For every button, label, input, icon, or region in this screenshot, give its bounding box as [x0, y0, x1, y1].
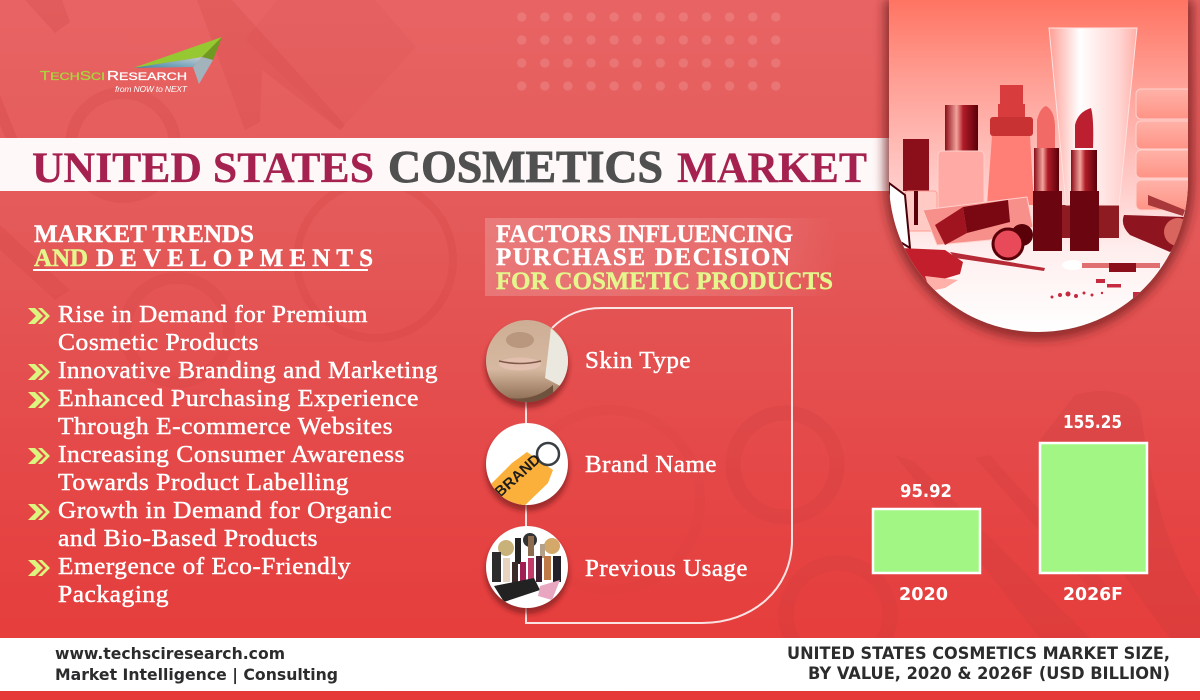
- title: Market: MARKET: [677, 145, 867, 192]
- label: skin type: Skin Type: [585, 348, 691, 374]
- factor: skin type: [485, 320, 691, 408]
- jars: [1136, 89, 1192, 210]
- pump bottle: [987, 85, 1034, 205]
- list item four: Towards Product Labelling: [58, 470, 349, 496]
- value: 95.92: 95.92: [900, 481, 952, 502]
- spilled powder: [1050, 279, 1140, 298]
- photo shadow: [884, 0, 1194, 340]
- logo: TechSci Research: [40, 37, 222, 94]
- logo wordmark: TECH SCI: [40, 68, 105, 83]
- chart caption line two: BY VALUE, 2020 & 2026F (USD BILLION): [808, 664, 1170, 683]
- bar: 2020: [873, 509, 980, 573]
- list item two: Innovative Branding and Marketing: [58, 358, 438, 384]
- nail polish bottle: [903, 139, 937, 231]
- heading line one: FACTORS INFLUENCING: [496, 221, 793, 248]
- footer tagline: Market Intelligence | Consulting: [55, 665, 338, 685]
- footer website: www.techsciresearch.com: [55, 644, 285, 663]
- factor: previous usage: [485, 526, 748, 614]
- title band: [0, 138, 889, 192]
- photo: face with cotton pad: [486, 320, 568, 402]
- title: Cosmetics: COSMETICS: [388, 141, 663, 192]
- photo: assorted cosmetics: [486, 526, 568, 608]
- tube: [1049, 28, 1137, 238]
- list item four: [58, 442, 405, 496]
- list item three: Through E-commerce Websites: [58, 414, 393, 440]
- photo: cosmetics products: [889, 0, 1192, 332]
- list item four: Increasing Consumer Awareness: [58, 442, 405, 468]
- list item three: Enhanced Purchasing Experience: [58, 386, 419, 412]
- heading spaced word: DEVELOPMENTS: [96, 245, 373, 272]
- label: brand name: Brand Name: [585, 452, 717, 478]
- heading accent word: AND: [34, 245, 88, 272]
- bar chart: market size: [873, 412, 1147, 605]
- list item one: Rise in Demand for Premium: [58, 302, 368, 328]
- heading: market trends and developments: [33, 221, 373, 272]
- logo icon: paper plane: [133, 37, 222, 84]
- bar: 2026F: [1040, 443, 1147, 573]
- logo wordmark second part: RESEARCH: [107, 68, 187, 83]
- icon: brand tag: BRAND: [491, 451, 544, 501]
- lying nail polish: [923, 197, 1033, 245]
- list item five: and Bio-Based Products: [58, 526, 318, 552]
- label: previous usage: Previous Usage: [585, 556, 748, 582]
- heading underline: [33, 269, 368, 271]
- list item one: [58, 302, 368, 356]
- axis label: 2020: 2020: [899, 584, 948, 605]
- value: 155.25: 155.25: [1063, 412, 1122, 433]
- list item five: Growth in Demand for Organic: [58, 498, 392, 524]
- chevron bullets: [28, 308, 50, 576]
- title: United States: UNITED STATES: [32, 145, 374, 192]
- list: market trends: [28, 302, 438, 608]
- dot grid decoration: [515, 11, 783, 93]
- lying lipstick: [1123, 195, 1192, 252]
- square bottle: [938, 105, 984, 211]
- list item six: [58, 554, 351, 608]
- list item six: Emergence of Eco-Friendly: [58, 554, 351, 580]
- round compact: [993, 224, 1033, 259]
- list item one: Cosmetic Products: [58, 330, 259, 356]
- list item five: [58, 498, 392, 552]
- heading line two: PURCHASE DECISION: [496, 244, 790, 271]
- list item three: [58, 386, 419, 440]
- eyeshadow palette: [889, 183, 963, 291]
- axis label: 2026F: 2026F: [1063, 584, 1123, 605]
- chart caption line one: UNITED STATES COSMETICS MARKET SIZE,: [787, 644, 1170, 663]
- logo tagline: from NOW to NEXT: [115, 84, 188, 94]
- heading line one: MARKET TRENDS: [34, 221, 254, 248]
- list item six: Packaging: [58, 582, 169, 608]
- heading panel: factors influencing purchase decision: [485, 218, 837, 296]
- lipstick two: [1070, 108, 1099, 251]
- icon: brand tag: [486, 423, 568, 505]
- footer band: [0, 638, 1200, 691]
- heading line three: FOR COSMETIC PRODUCTS: [496, 268, 833, 295]
- factor: brand name: [480, 423, 717, 515]
- connector outline: [526, 308, 792, 623]
- applicators: [950, 252, 1160, 272]
- lipstick one: [1033, 106, 1062, 251]
